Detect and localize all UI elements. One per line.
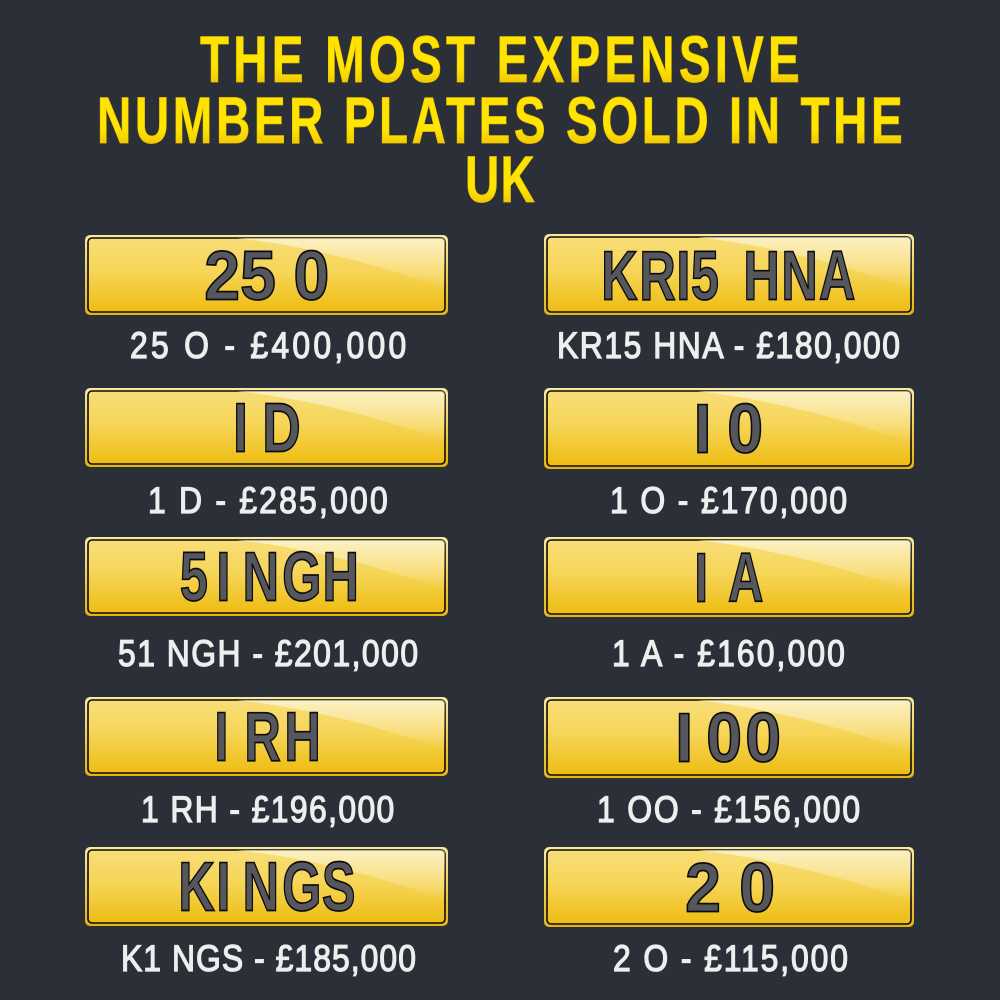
- panel: 1 RH entry: [85, 697, 448, 831]
- plate: 1 A: [544, 537, 914, 617]
- panel: 1 OO entry: [544, 697, 914, 831]
- title: NUMBER PLATES SOLD IN THE: [97, 84, 903, 158]
- plate: 2 O: [544, 847, 914, 927]
- panel: 1 D entry: [85, 388, 448, 522]
- plate: K1 NGS: [85, 847, 448, 926]
- plate: 1 RH: [85, 697, 448, 776]
- price label: 1 O - £170,000: [610, 480, 847, 522]
- title: UK: [465, 143, 535, 217]
- price label: 1 A - £160,000: [612, 633, 845, 675]
- price label: KR15 HNA - £180,000: [557, 325, 900, 367]
- plate: 1 D: I D: [233, 390, 301, 467]
- plate: KR15 HNA: KRI5 HNA: [601, 236, 855, 314]
- price label: 1 RH - £196,000: [141, 789, 394, 831]
- plate: KR15 HNA: [544, 234, 914, 315]
- plate: 1 O: I 0: [694, 390, 763, 468]
- plate: 1 O: [544, 388, 914, 469]
- price label: 51 NGH - £201,000: [118, 633, 418, 675]
- panel: K1 NGS entry: [85, 847, 448, 980]
- plate: 25 O: [85, 235, 448, 315]
- panel: 51 NGH entry: [85, 537, 448, 675]
- panel: 1 O entry: [544, 388, 914, 522]
- price label: 1 D - £285,000: [148, 480, 388, 522]
- price label: 25 O - £400,000: [130, 325, 406, 367]
- panel: 2 O entry: [544, 847, 914, 980]
- plate: 1 A: I A: [694, 538, 763, 617]
- price label: K1 NGS - £185,000: [121, 938, 416, 980]
- panel: 25 O entry: [85, 235, 448, 367]
- plate: 2 O: 2 0: [685, 849, 775, 927]
- title: THE MOST EXPENSIVE: [200, 23, 800, 97]
- plate: 25 O: 25 0: [204, 237, 329, 315]
- panel: KR15 HNA entry: [544, 234, 914, 367]
- panel: 1 A entry: [544, 537, 914, 675]
- plate: 51 NGH: [85, 537, 448, 616]
- plate: 1 D: [85, 388, 448, 467]
- plate: K1 NGS: KI NGS: [178, 847, 355, 925]
- price label: 1 OO - £156,000: [597, 789, 860, 831]
- plate: 1 RH: I RH: [214, 697, 321, 775]
- plate: 1 OO: [544, 697, 914, 778]
- plate: 51 NGH: 5I NGH: [180, 537, 359, 615]
- plate: 1 OO: I 00: [675, 699, 781, 777]
- price label: 2 O - £115,000: [613, 938, 848, 980]
- title: [97, 23, 903, 217]
